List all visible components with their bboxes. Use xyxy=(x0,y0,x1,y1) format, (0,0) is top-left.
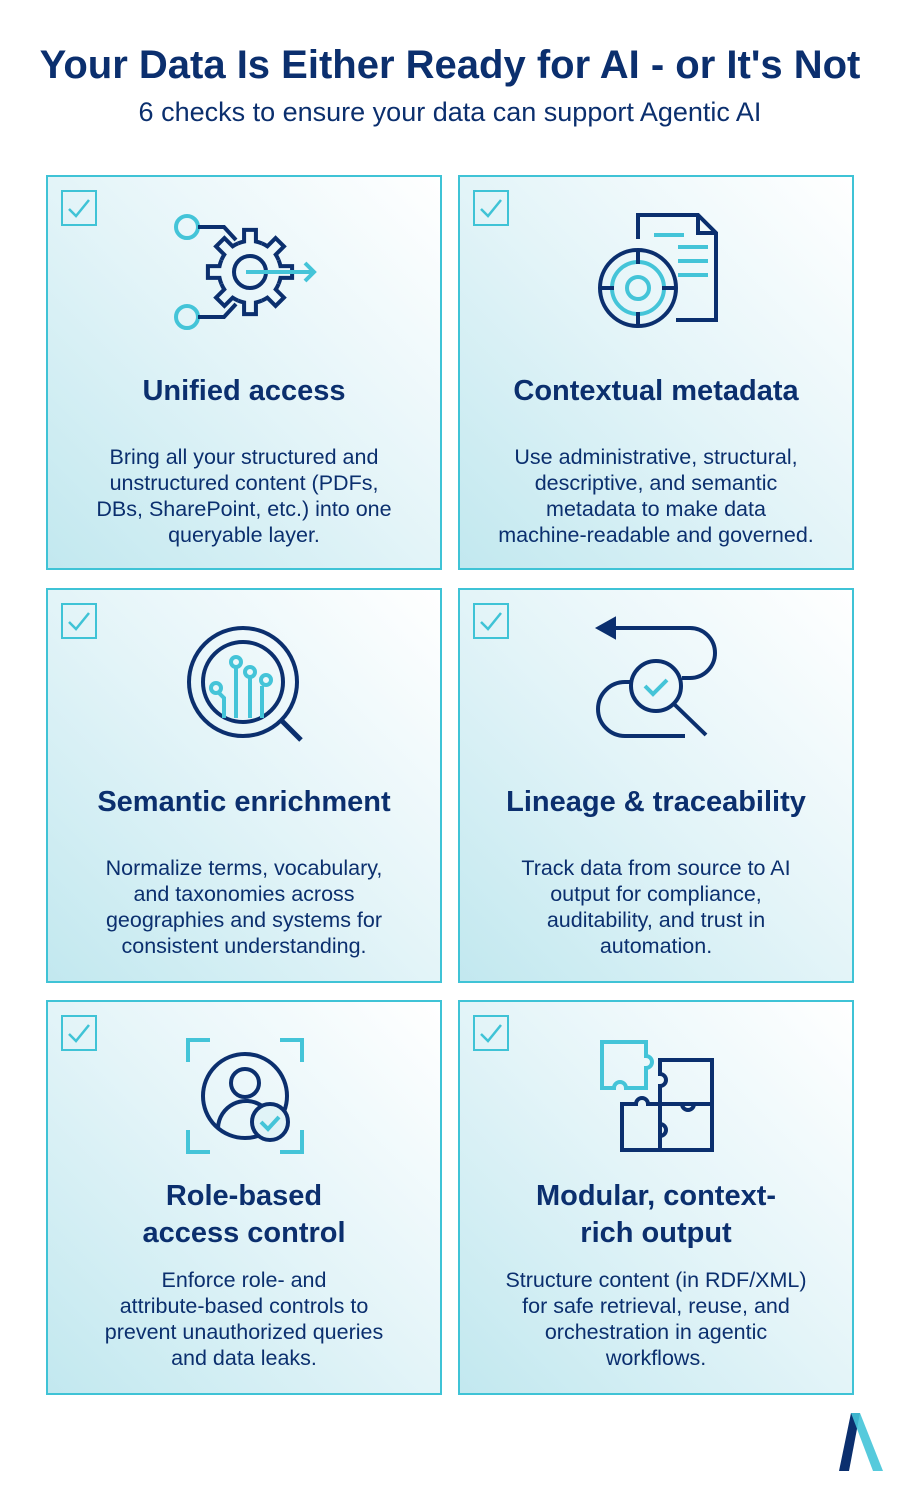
icon: gear with arrow xyxy=(174,214,317,330)
panel: unified access xyxy=(46,175,442,570)
heading: Semantic enrichment xyxy=(97,786,391,818)
panel: semantic enrichment xyxy=(46,588,442,983)
heading: rich output xyxy=(580,1217,732,1249)
body text: and data leaks. xyxy=(171,1346,317,1370)
body text: prevent unauthorized queries xyxy=(105,1320,383,1344)
body text: Use administrative, structural, xyxy=(514,445,798,469)
panel: role-based access control xyxy=(46,1000,442,1395)
heading: Unified access xyxy=(142,375,346,407)
body text: for safe retrieval, reuse, and xyxy=(522,1294,790,1318)
body text: Normalize terms, vocabulary, xyxy=(106,856,382,880)
body text xyxy=(106,856,382,958)
checkbox xyxy=(61,190,97,226)
icon: user with frame xyxy=(186,1038,304,1154)
heading: Modular, context- xyxy=(536,1180,776,1212)
body text xyxy=(96,445,392,547)
body text xyxy=(498,445,814,547)
title: Your Data Is Either Ready for AI - or It's Not xyxy=(40,43,860,87)
logo xyxy=(839,1413,883,1471)
body text: automation. xyxy=(600,934,712,958)
body text: queryable layer. xyxy=(168,523,320,547)
body text: Bring all your structured and xyxy=(110,445,378,469)
body text xyxy=(521,856,791,958)
body text: Structure content (in RDF/XML) xyxy=(505,1268,807,1292)
body text: DBs, SharePoint, etc.) into one xyxy=(96,497,392,521)
body text: geographies and systems for xyxy=(106,908,382,932)
heading: access control xyxy=(142,1217,346,1249)
icon: magnifier with circuit xyxy=(187,626,303,742)
body text: unstructured content (PDFs, xyxy=(110,471,378,495)
body text: orchestration in agentic xyxy=(545,1320,767,1344)
body text xyxy=(505,1268,807,1370)
heading: Lineage & traceability xyxy=(506,786,806,818)
heading: Contextual metadata xyxy=(513,375,799,407)
panel: contextual metadata xyxy=(458,175,854,570)
subtitle: 6 checks to ensure your data can support Agentic AI xyxy=(139,97,761,127)
body text: auditability, and trust in xyxy=(547,908,765,932)
icon: puzzle xyxy=(600,1040,714,1152)
panel: modular output xyxy=(458,1000,854,1395)
heading xyxy=(536,1180,776,1249)
body text: attribute-based controls to xyxy=(120,1294,368,1318)
body text: workflows. xyxy=(606,1346,706,1370)
body text: and taxonomies across xyxy=(133,882,355,906)
body text: machine-readable and governed. xyxy=(498,523,814,547)
body text: consistent understanding. xyxy=(121,934,367,958)
panel: lineage & traceability xyxy=(458,588,854,983)
body text: Enforce role- and xyxy=(162,1268,326,1292)
icon: document with target xyxy=(598,213,718,328)
body text: descriptive, and semantic xyxy=(535,471,777,495)
body text: Track data from source to AI xyxy=(521,856,791,880)
body text xyxy=(105,1268,383,1370)
body text: output for compliance, xyxy=(550,882,762,906)
heading xyxy=(142,1180,346,1249)
heading: Role-based xyxy=(166,1180,322,1212)
body text: metadata to make data xyxy=(546,497,766,521)
icon: loop arrow with magnifier xyxy=(595,616,717,738)
